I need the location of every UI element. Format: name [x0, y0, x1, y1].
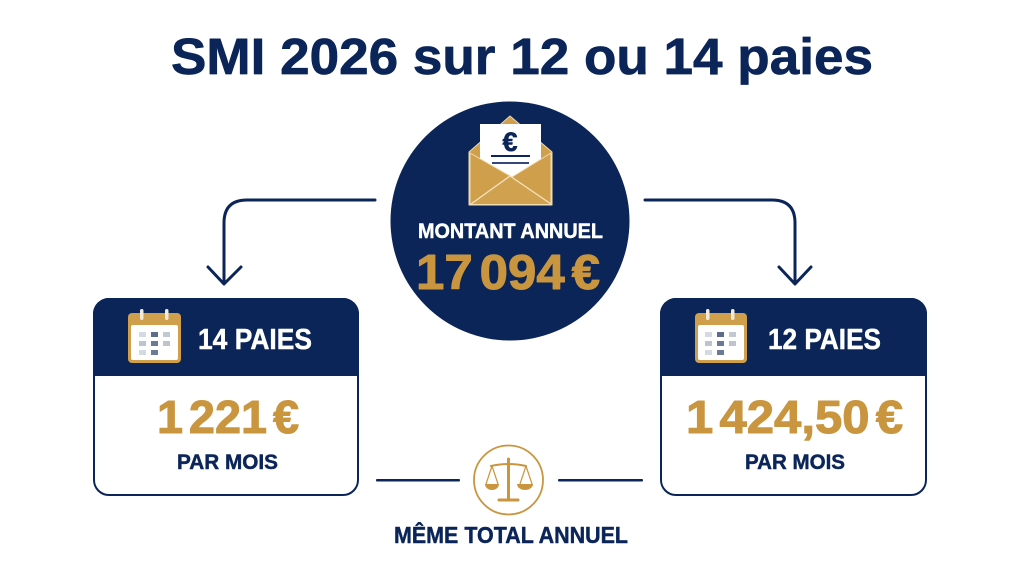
- label: par mois: PAR MOIS: [177, 451, 278, 474]
- heading: 14 paies: 14 PAIES: [198, 324, 312, 356]
- icon: calendar: [695, 309, 747, 363]
- panel: 14 paies: [93, 298, 359, 495]
- icon: calendar: [128, 309, 181, 363]
- value: 1 424,50 euros: 1 424,50 €: [686, 391, 903, 443]
- panel: annual amount circle: [390, 102, 630, 340]
- caption: même total annuel: MÊME TOTAL ANNUEL: [394, 521, 628, 548]
- connector: left line: [376, 479, 460, 482]
- arrow: annual amount to 12 paies: [645, 200, 811, 284]
- heading: 12 paies: 12 PAIES: [768, 324, 881, 356]
- value: 1 221 euros: 1 221 €: [157, 391, 299, 443]
- value: annual amount: 17 094 €: [416, 246, 600, 300]
- connector: right line: [558, 479, 643, 482]
- label: par mois: PAR MOIS: [745, 451, 845, 474]
- panel: 12 paies: [660, 298, 927, 495]
- title: SMI 2026 sur 12 ou 14 paies: [171, 28, 873, 85]
- arrow: annual amount to 14 paies: [208, 200, 375, 284]
- icon: balance scales: [474, 446, 543, 514]
- icon: envelope with euro letter: [469, 116, 552, 205]
- icon: envelope with euro letter: €: [502, 127, 518, 157]
- label: montant annuel: MONTANT ANNUEL: [418, 220, 603, 243]
